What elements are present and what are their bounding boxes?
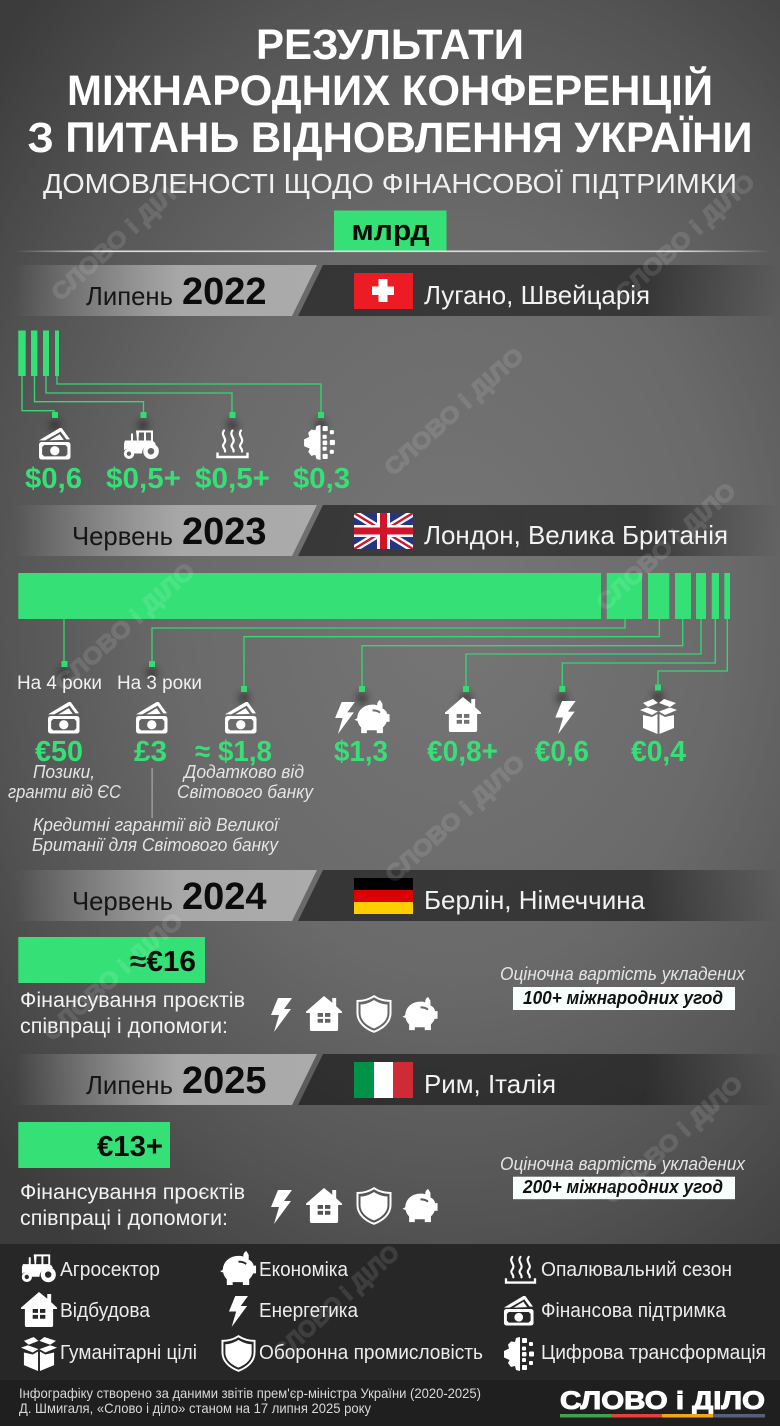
chart: London 2023 allocation [18,573,730,704]
notes: London 2023: Кредитні гарантії від Великої [33,815,280,835]
unit label: billions [334,210,446,250]
chart: Rome 2025 amount [18,1122,170,1168]
icons and values: London 2023: €0,8+ [427,736,498,768]
legend panel: Оборонна промисловість [259,1342,483,1364]
watermarks [38,167,760,1366]
callout: Berlin agreements [500,964,746,1010]
legend panel: Агросектор [60,1259,160,1281]
legend panel: Гуманітарні цілі [60,1342,197,1364]
icons and values: Lugano 2022 [25,425,350,495]
legend panel: Відбудова [60,1300,151,1322]
watermarks: СЛОВО і ДІЛО [380,749,530,888]
icons: Berlin sectors [271,996,438,1032]
watermarks: СЛОВО і ДІЛО [598,1070,748,1209]
watermarks: СЛОВО і ДІЛО [46,167,196,306]
text: financing Berlin [20,989,245,1038]
legend panel [0,1244,780,1380]
labels: term of loans: На 3 роки [117,673,202,694]
icons and values: London 2023: $1,3 [334,736,388,768]
icons and values: Lugano 2022: $0,3 [293,463,350,495]
notes: London 2023: Позики, [33,762,95,782]
labels: term of loans: На 4 роки [17,673,102,694]
text: financing Berlin: Фінансування проєктів [20,989,245,1012]
chart: Rome 2025 amount: €13+ [97,1131,163,1163]
section header: June 2024: Берлін, Німеччина [424,885,646,915]
notes: London 2023: Британії для Світового банку [32,835,279,855]
subtitle: ДОМОВЛЕНОСТІ ЩОДО ФІНАНСОВОЇ ПІДТРИМКИ [43,168,737,199]
icons and values: Lugano 2022: $0,6 [25,463,82,495]
legend panel: Цифрова трансформація [541,1342,766,1364]
section header: July 2022: Липень [86,281,173,311]
legend panel: Опалювальний сезон [541,1259,732,1281]
title: МІЖНАРОДНИХ КОНФЕРЕНЦІЙ [67,66,713,115]
section header: June 2023: Лондон, Велика Британія [424,520,728,550]
title: РЕЗУЛЬТАТИ [256,21,524,69]
section header: July 2025: Липень [86,1070,173,1100]
callout: Rome agreements: 200+ міжнародних угод [522,1177,723,1197]
notes: London 2023: гранти від ЄС [8,782,122,802]
footer panel: Інфографіку створено за даними звітів прем'єр-міністра України (2020-2025) [19,1385,481,1401]
text: financing Berlin: співпраці і допомоги: [20,1015,228,1038]
watermarks: СЛОВО і ДІЛО [610,168,760,307]
section header: July 2022: Лугано, Швейцарія [424,280,650,310]
text: financing Rome: співпраці і допомоги: [20,1207,228,1230]
icons and values: London 2023: €0,4 [631,736,686,768]
icons and values: London 2023: €50 [35,736,83,768]
icons and values: London 2023: £3 [134,736,167,768]
icons and values: London 2023 [35,697,686,768]
callout: Berlin agreements: Оціночна вартість укладених [500,964,746,984]
title: З ПИТАНЬ ВІДНОВЛЕННЯ УКРАЇНИ [28,114,752,162]
notes: London 2023: Додатково від [182,762,304,782]
watermarks: СЛОВО і ДІЛО [38,907,188,1046]
section header: July 2025: Рим, Італія [424,1069,556,1099]
section header: June 2024: Червень [72,886,173,916]
callout: Berlin agreements: 100+ міжнародних угод [523,988,723,1008]
icons and values: Lugano 2022: $0,5+ [195,463,270,495]
footer panel [0,1380,780,1426]
watermarks: СЛОВО і ДІЛО [379,342,529,481]
watermarks: СЛОВО і ДІЛО [50,557,200,696]
section header: June 2024: 2024 [182,876,267,918]
callout: Rome agreements [500,1154,746,1199]
legend panel: Економіка [259,1259,349,1281]
chart: Berlin 2024 amount [18,937,205,983]
text: financing Rome [20,1181,245,1230]
watermarks: СЛОВО і ДІЛО [268,1239,404,1366]
notes: London 2023 [8,762,314,855]
section header: July 2025 [15,1054,780,1105]
chart: Berlin 2024 amount: ≈€16 [130,946,196,978]
text: financing Rome: Фінансування проєктів [20,1181,245,1204]
legend panel: Фінансова підтримка [541,1300,727,1322]
section header: June 2024 [15,870,780,921]
callout: Rome agreements: Оціночна вартість укладених [500,1154,746,1174]
icons and values: London 2023: ≈ $1,8 [195,736,272,768]
icons and values: London 2023: €0,6 [535,736,589,768]
icons: Rome sectors [271,1188,438,1224]
section header: July 2025: 2025 [182,1060,267,1102]
labels: term of loans [17,673,202,694]
chart: Lugano 2022 allocation [18,330,327,431]
watermarks: СЛОВО і ДІЛО [591,477,741,616]
logo: СЛОВО і ДІЛО [560,1387,765,1415]
section header: July 2022 [15,265,780,316]
section header: June 2023: 2023 [182,511,267,553]
title [28,21,752,162]
footer panel: Д. Шмигаля, «Слово і діло» станом на 17 липня 2025 року [19,1400,371,1416]
section header: June 2023: Червень [72,521,173,551]
unit label: billions: млрд [352,215,430,247]
icons and values: Lugano 2022: $0,5+ [106,463,181,495]
legend panel: Енергетика [259,1300,359,1322]
notes: London 2023: Світового банку [177,782,314,802]
section header: July 2022: 2022 [182,271,267,313]
section header: June 2023 [15,505,780,556]
